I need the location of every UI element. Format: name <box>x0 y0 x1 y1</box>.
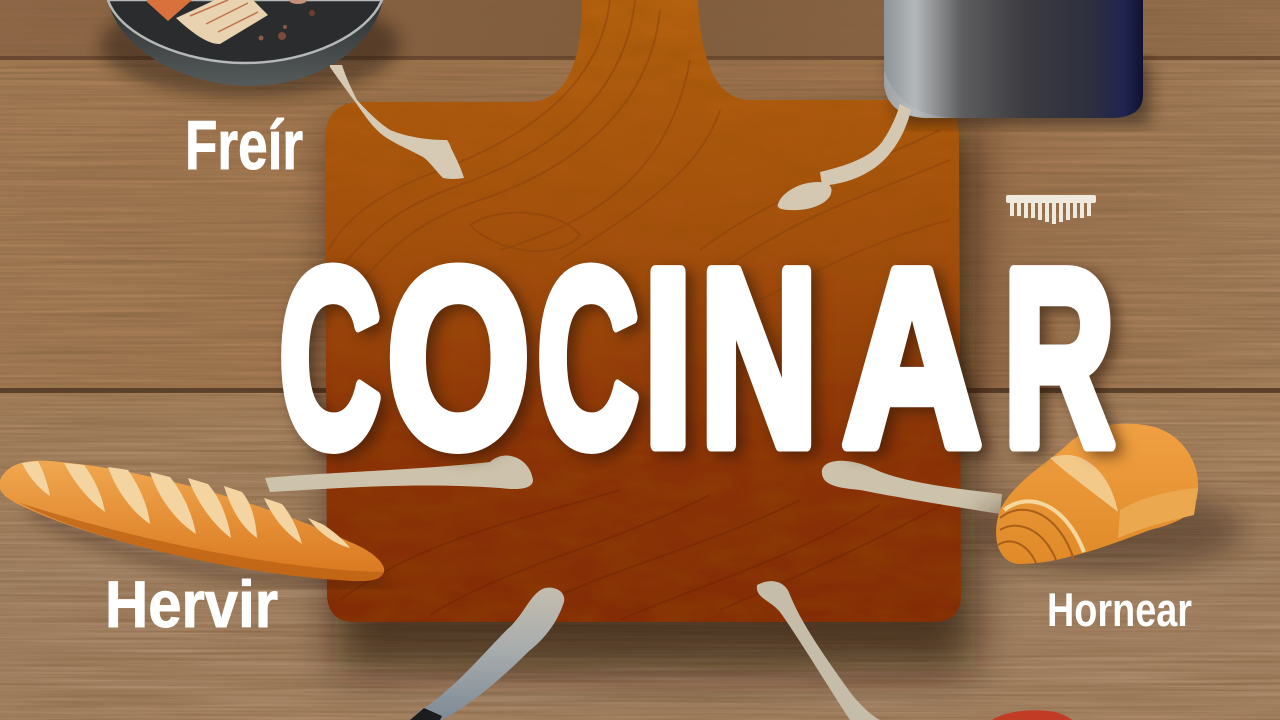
title <box>279 218 1115 499</box>
pot <box>884 0 1150 125</box>
icon: small white comb-like scribble <box>1006 195 1096 224</box>
cutting board <box>320 0 975 670</box>
food in pan <box>147 0 315 44</box>
title: C <box>537 218 639 499</box>
title: O <box>387 218 530 499</box>
connector: bread to board <box>822 461 1002 514</box>
label: Freír: Freír <box>185 106 303 184</box>
utensil: spoon handle to board <box>757 581 880 720</box>
title: R <box>1003 218 1115 499</box>
label: Hornear: Hornear <box>1047 583 1192 636</box>
connector: baguette to board <box>265 456 533 492</box>
utensil: fork handle to board <box>410 588 564 720</box>
connector: pot to board <box>778 104 911 210</box>
connector: frying pan to board <box>330 65 464 179</box>
title: C <box>279 218 381 499</box>
title: I <box>643 218 693 499</box>
title: N <box>700 218 818 499</box>
baguette score marks <box>22 461 350 548</box>
baguette <box>0 461 385 582</box>
red food at bottom edge <box>992 710 1072 720</box>
bread loaf <box>975 424 1245 572</box>
label: Hervir: Hervir <box>105 567 278 641</box>
frying pan <box>100 0 400 97</box>
title: A <box>842 218 982 499</box>
